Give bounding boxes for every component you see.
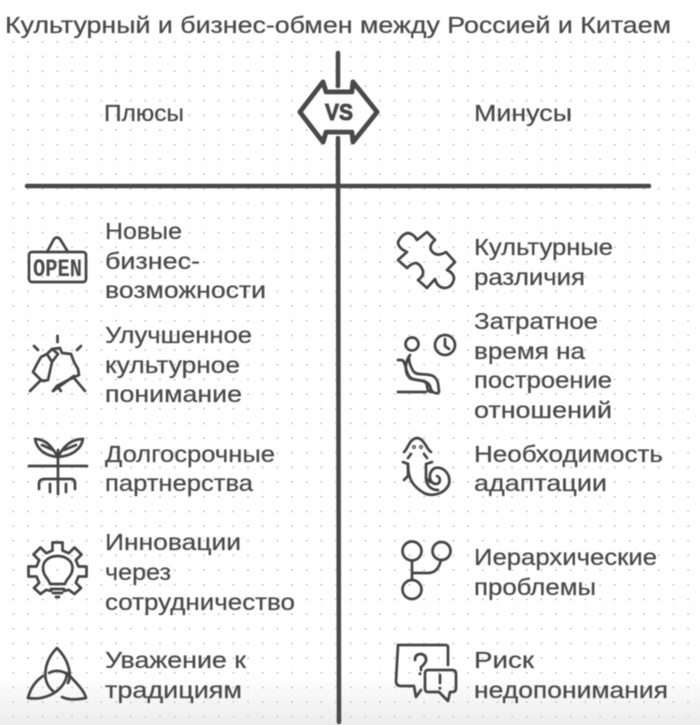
- text: need for adaptation: адаптации: [474, 470, 607, 496]
- icon: branching hierarchy: [402, 542, 450, 599]
- text: long-term partnerships: партнерства: [105, 470, 253, 496]
- text: innovation through collaboration: [105, 529, 295, 615]
- icon: salamander: [403, 438, 449, 495]
- icon: person waiting with clock: [398, 335, 455, 393]
- text: improved cultural understanding: Улучшенное: [105, 322, 252, 348]
- text: new business opportunities: возможности: [105, 277, 266, 303]
- icon: sprout: [29, 439, 87, 494]
- text: risk of misunderstanding: Риск: [474, 647, 535, 673]
- text: time-consuming relationship building: Затратное: [474, 308, 598, 334]
- text: time-consuming relationship building: построение: [474, 367, 612, 393]
- text: long-term partnerships: [105, 441, 275, 496]
- icon: gear with light bulb: [28, 542, 86, 597]
- text: hierarchical problems: проблемы: [474, 574, 596, 600]
- title: Культурный и бизнес-обмен между Россией и Китаем: [5, 12, 671, 38]
- text: hierarchical problems: [474, 544, 657, 600]
- icon: speech bubbles with question and exclamation marks: [396, 645, 456, 701]
- text: new business opportunities: бизнес-: [105, 248, 200, 274]
- text: hierarchical problems: Иерархические: [474, 544, 657, 570]
- text: cultural differences: Культурные: [474, 234, 613, 260]
- icon: puzzle piece: [398, 232, 455, 288]
- heading: pros: Плюсы: [104, 100, 184, 126]
- text: respect for traditions: [105, 647, 247, 703]
- heading: cons: Минусы: [474, 100, 572, 126]
- text: new business opportunities: [105, 218, 266, 303]
- text: risk of misunderstanding: недопонимания: [474, 677, 668, 703]
- VS badge: VS: [325, 99, 353, 125]
- icon: triquetra knot: [28, 648, 86, 699]
- text: time-consuming relationship building: время на: [474, 338, 585, 364]
- VS badge: [300, 82, 377, 142]
- text: cultural differences: различия: [474, 264, 585, 290]
- text: risk of misunderstanding: [474, 647, 668, 703]
- text: need for adaptation: Необходимость: [474, 441, 663, 467]
- text: innovation through collaboration: сотрудничество: [105, 589, 295, 615]
- panel: cons: [396, 232, 668, 703]
- text: improved cultural understanding: [105, 322, 252, 407]
- text: need for adaptation: [474, 441, 663, 496]
- panel: pros: [28, 218, 295, 703]
- text: improved cultural understanding: культурное: [105, 352, 240, 378]
- text: respect for traditions: традициям: [105, 677, 242, 703]
- text: cultural differences: [474, 234, 613, 290]
- text: long-term partnerships: Долгосрочные: [105, 441, 275, 467]
- text: innovation through collaboration: Инновации: [105, 529, 241, 555]
- text: new business opportunities: Новые: [105, 218, 182, 244]
- text: respect for traditions: Уважение к: [105, 647, 247, 673]
- text: time-consuming relationship building: отношений: [474, 397, 612, 423]
- icon: handshake: [30, 336, 85, 391]
- text: innovation through collaboration: через: [105, 559, 171, 585]
- icon: open sign: [29, 238, 86, 284]
- text: time-consuming relationship building: [474, 308, 612, 423]
- text: improved cultural understanding: понимание: [105, 381, 242, 407]
- icon: open sign: OPEN: [33, 255, 82, 284]
